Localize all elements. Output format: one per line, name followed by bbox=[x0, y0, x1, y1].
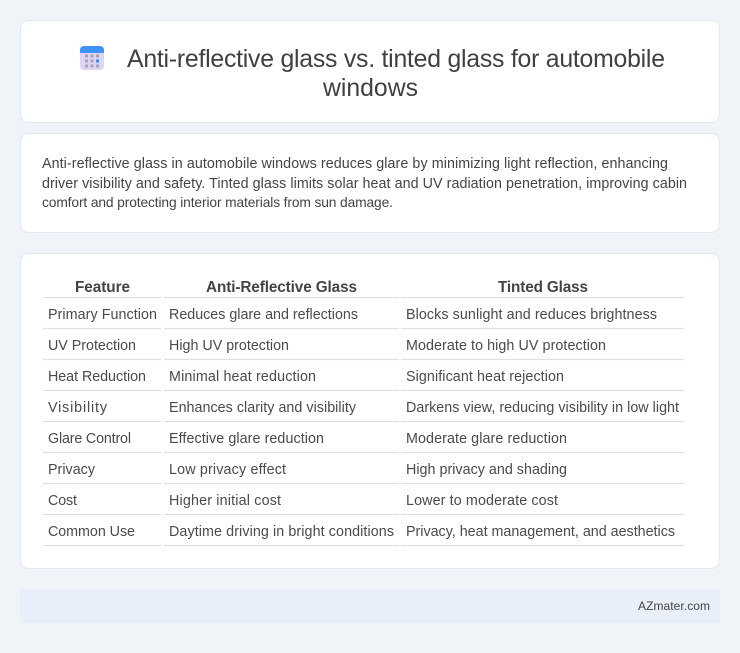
footer credit: AZmater.com bbox=[638, 599, 710, 613]
row: visibility: Visibility bbox=[48, 400, 108, 416]
row: cost: Lower to moderate cost bbox=[406, 493, 558, 509]
row: common use bbox=[48, 524, 675, 540]
row: cost: Cost bbox=[48, 493, 77, 509]
text block: summary paragraph: comfort and protecting interior materials from sun damage. bbox=[42, 195, 393, 210]
row: common use: Common Use bbox=[48, 524, 135, 540]
row: UV protection bbox=[48, 338, 606, 354]
icon: calendar bbox=[80, 46, 104, 70]
row: UV protection: UV Protection bbox=[48, 338, 136, 354]
table header: Tinted Glass bbox=[498, 279, 588, 296]
table header bbox=[75, 279, 588, 296]
table header: Feature bbox=[75, 279, 130, 296]
panel: summary bbox=[20, 134, 720, 232]
title: windows bbox=[322, 75, 418, 102]
row: glare control: Moderate glare reduction bbox=[406, 431, 567, 447]
row: heat reduction: Minimal heat reduction bbox=[169, 369, 316, 385]
panel: title card bbox=[20, 20, 720, 122]
row: glare control: Glare Control bbox=[48, 431, 131, 447]
row: heat reduction: Significant heat rejection bbox=[406, 369, 564, 385]
table header: Anti-Reflective Glass bbox=[206, 279, 357, 296]
row: privacy bbox=[48, 462, 567, 478]
row: heat reduction bbox=[48, 369, 564, 385]
row: primary function bbox=[48, 307, 657, 323]
row: visibility: Enhances clarity and visibility bbox=[169, 400, 357, 416]
row: UV protection: High UV protection bbox=[169, 338, 289, 354]
row: primary function: Blocks sunlight and reduces brightness bbox=[406, 307, 657, 323]
row: primary function: Primary Function bbox=[48, 307, 157, 323]
row: primary function: Reduces glare and reflections bbox=[169, 307, 358, 323]
row: visibility bbox=[48, 400, 679, 416]
row: privacy: Privacy bbox=[48, 462, 96, 478]
row: visibility: Darkens view, reducing visibility in low light bbox=[406, 400, 679, 416]
row: privacy: Low privacy effect bbox=[169, 462, 286, 478]
row: glare control: Effective glare reduction bbox=[169, 431, 324, 447]
footer bar bbox=[20, 589, 720, 623]
row: common use: Privacy, heat management, and aesthetics bbox=[406, 524, 675, 540]
row: cost: Higher initial cost bbox=[169, 493, 281, 509]
text block: summary paragraph: driver visibility and safety. Tinted glass limits solar heat and UV radiation penetration, improving cabin bbox=[42, 176, 687, 192]
panel: comparison table bbox=[20, 254, 720, 568]
row: glare control bbox=[48, 431, 567, 447]
row: privacy: High privacy and shading bbox=[406, 462, 567, 478]
row: UV protection: Moderate to high UV protection bbox=[406, 338, 606, 354]
title: Anti-reflective glass vs. tinted glass for automobile bbox=[127, 46, 665, 73]
text block: summary paragraph: Anti-reflective glass in automobile windows reduces glare by minimizing light reflection, enhancing bbox=[42, 156, 668, 172]
row: cost bbox=[48, 493, 558, 509]
row: heat reduction: Heat Reduction bbox=[48, 369, 146, 385]
row: common use: Daytime driving in bright conditions bbox=[169, 524, 394, 540]
